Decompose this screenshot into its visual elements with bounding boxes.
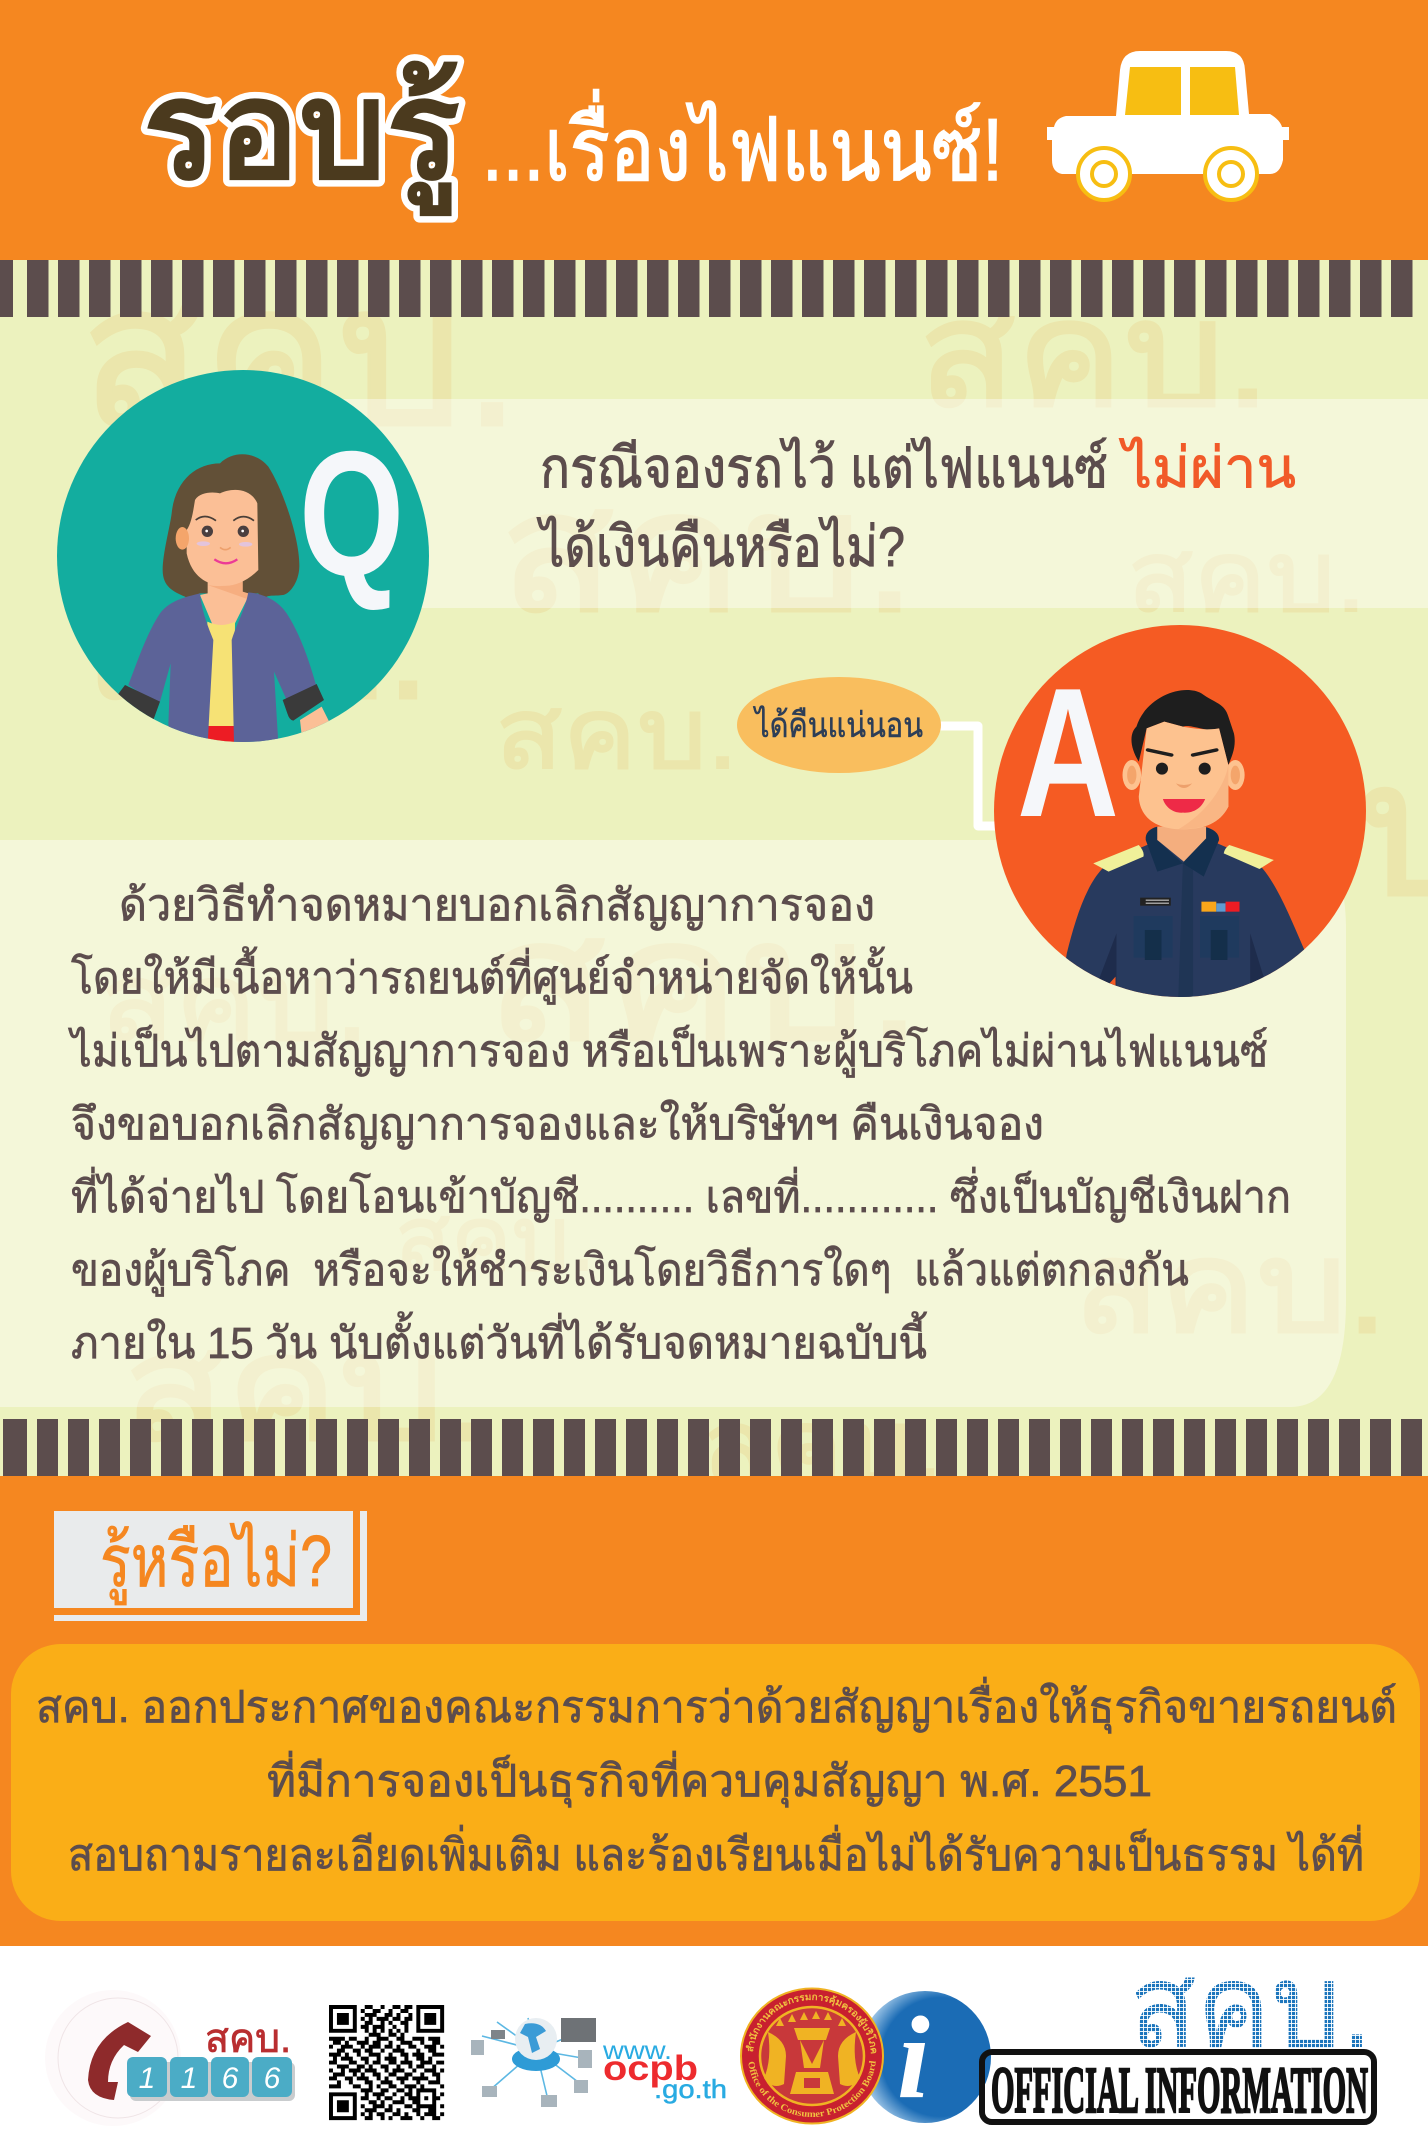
logo: hotline 1166: 6 [222,2062,239,2095]
logo: network globe ocpb.go.th: .go.th [654,2074,727,2104]
logo: hotline 1166 [45,1990,295,2126]
watermark pattern: สคบ. [918,270,1270,438]
icon: Q character circle: Q [299,415,404,613]
logo: seal: สำนักงานคณะกรรมการคุ้มครองผู้บริโภค [746,1994,878,2054]
panel: info box: สอบถามรายละเอียดเพิ่มเติม และร้องเรียนเมื่อไม่ได้รับความเป็นธรรม ได้ที่ [68,1824,1364,1880]
icon: A character circle [994,625,1366,1013]
panel: info box: สคบ. ออกประกาศของคณะกรรมการว่าด้วยสัญญาเรื่องให้ธุรกิจขายรถยนต์ [36,1676,1397,1734]
answer body text: ภายใน 15 วัน นับตั้งแต่วันที่ได้รับจดหมายฉบับนี้ [71,1311,927,1368]
callout bubble [737,677,941,773]
bottom stripe [3,1419,1422,1476]
did you know label: รู้หรือไม่? [100,1521,332,1605]
logo: network globe ocpb.go.th: www. [602,2035,672,2065]
logo: dotted OCPB text: สคบ. [1129,1941,1372,2073]
logo: info i: i [897,1992,930,2123]
watermark pattern: สคบ. [100,941,369,1064]
question text [537,436,1296,578]
logo: seal: Office of the Consumer Protection Board [748,2060,876,2117]
logo: seal [740,1988,884,2124]
watermark pattern: สคบ. [499,458,916,648]
answer body text: โดยให้มีเนื้อหาว่ารถยนต์ที่ศูนย์จำหน่ายจัดให้นั้น [71,946,913,1005]
watermark pattern [80,245,1428,1502]
did you know label [54,1511,367,1621]
QR code [329,2005,444,2120]
logo: hotline 1166: 1 [181,2062,197,2095]
footer background [0,1946,1428,2142]
watermark pattern: สคบ. [703,1390,943,1502]
title [143,54,1003,217]
logo: info i [859,1991,991,2123]
title: รอบรู้ [143,54,460,217]
watermark pattern: สคบ. [80,245,520,468]
watermark pattern: สคบ. [123,1304,492,1472]
title: ...เรื่องไฟแนนซ์! [482,89,1003,199]
panel: info box: ที่มีการจองเป็นธุรกิจที่ควบคุมสัญญา พ.ศ. 2551 [267,1750,1152,1808]
icon: Q character circle [57,370,429,750]
answer body text: ของผู้บริโภค หรือจะให้ชำระเงินโดยวิธีการใดๆ แล้วแต่ตกลงกัน [71,1245,1189,1297]
orange lower section [0,1476,1428,1946]
answer body text: จึงขอบอกเลิกสัญญาการจองและให้บริษัทฯ คืนเงินจอง [71,1099,1044,1149]
watermark pattern: สคบ. [485,887,922,1077]
top stripe [0,260,1416,317]
answer body text: ไม่เป็นไปตามสัญญาการจอง หรือเป็นเพราะผู้บริโภคไม่ผ่านไฟแนนซ์ [68,1025,1268,1078]
watermark pattern: สคบ. [1127,521,1366,633]
logo: hotline 1166: สคบ. [205,2017,291,2061]
answer body text: ด้วยวิธีทำจดหมายบอกเลิกสัญญาการจอง [119,881,875,930]
logo: network globe ocpb.go.th [471,2018,727,2107]
logo: hotline 1166: 6 [264,2062,281,2095]
panel: question band [243,399,1428,608]
question text: ได้เงินคืนหรือไม่? [537,515,905,578]
question text: ไม่ผ่าน [1119,436,1296,499]
icon: A character circle: A [1017,649,1119,855]
answer body text [68,881,1291,1368]
watermark pattern: สคบ. [495,678,738,790]
logo: hotline 1166: 1 [139,2062,155,2095]
panel: answer text background [0,840,1346,1407]
icon: car [1047,51,1289,200]
logo: network globe ocpb.go.th: ocpb [603,2049,698,2088]
callout bubble: ได้คืนแน่นอน [753,705,923,745]
question text: กรณีจองรถไว้ แต่ไฟแนนซ์ [540,436,1108,499]
header band [0,0,1428,260]
answer body text: ที่ได้จ่ายไป โดยโอนเข้าบัญชี.......... เลขที่............ ซึ่งเป็นบัญชีเงินฝาก [71,1166,1291,1222]
connector line [935,726,1000,826]
panel: info box [11,1644,1420,1921]
watermark pattern: สคบ. [85,562,430,730]
watermark pattern: สคบ. [395,1190,595,1290]
watermark pattern: สคบ. [1073,1214,1387,1360]
